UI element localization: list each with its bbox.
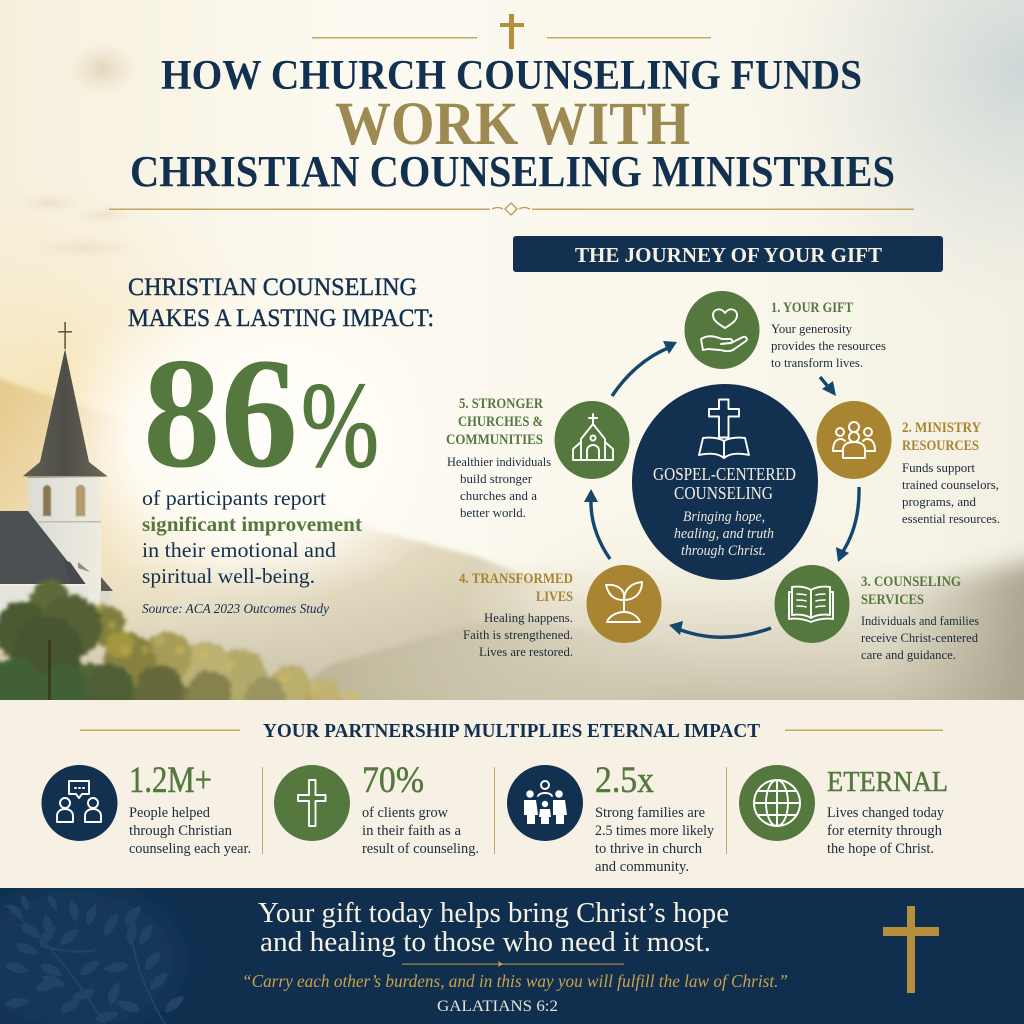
scripture quote: “Carry each other’s burdens, and in this way you will fulfill the law of Christ.” bbox=[242, 971, 788, 991]
stat: 2.5x: 2.5 times more likely bbox=[595, 823, 715, 839]
arrow 3 to 4 bbox=[669, 621, 771, 637]
impact heading bbox=[128, 274, 434, 332]
source note: Source: ACA 2023 Outcomes Study bbox=[142, 602, 330, 617]
step 1: your gift: provides the resources bbox=[771, 338, 886, 353]
step 3: counseling services: Individuals and families bbox=[861, 613, 979, 628]
stat: 1.2M+: 1.2M+ bbox=[129, 760, 212, 801]
center circle: GOSPEL-CENTERED bbox=[653, 464, 796, 484]
step 4: transformed lives bbox=[459, 565, 662, 659]
step 2: ministry resources: Funds support bbox=[902, 460, 975, 475]
step 5: stronger churches and communities: COMMUNITIES bbox=[446, 432, 543, 448]
footer band bbox=[0, 885, 1024, 1024]
step 2: ministry resources bbox=[816, 401, 1000, 526]
title: WORK WITH bbox=[335, 91, 690, 158]
step 2: ministry resources: essential resources. bbox=[902, 511, 1000, 526]
step 2: ministry resources: programs, and bbox=[902, 494, 976, 509]
stat: eternal: ETERNAL bbox=[827, 766, 948, 798]
footer message: and healing to those who need it most. bbox=[260, 926, 711, 958]
hero background scene bbox=[0, 0, 1024, 730]
step 5: stronger churches and communities: CHURCHES & bbox=[458, 414, 543, 430]
icon: cross and bible bbox=[699, 400, 749, 458]
stat: eternal: for eternity through bbox=[827, 823, 943, 839]
step 5 circle with church icon bbox=[554, 401, 630, 479]
step 4 circle with sprout icon bbox=[586, 565, 662, 643]
partnership heading: YOUR PARTNERSHIP MULTIPLIES ETERNAL IMPACT bbox=[263, 720, 760, 742]
step 1: your gift: 1. YOUR GIFT bbox=[771, 300, 853, 316]
step 5: stronger churches and communities bbox=[446, 396, 630, 520]
step 5: stronger churches and communities: better world. bbox=[460, 505, 526, 520]
step 3: counseling services: receive Christ-centered bbox=[861, 630, 978, 645]
footer message: Your gift today helps bring Christ’s hope bbox=[258, 897, 729, 929]
arrow 2 to 3 bbox=[836, 487, 859, 562]
step 3: counseling services: SERVICES bbox=[861, 592, 924, 608]
journey banner: THE JOURNEY OF YOUR GIFT bbox=[575, 243, 882, 267]
step 5: stronger churches and communities: 5. STRONGER bbox=[459, 396, 543, 412]
impact description: significant improvement bbox=[142, 512, 363, 536]
step 3: counseling services: 3. COUNSELING bbox=[861, 574, 961, 590]
impact description: of participants report bbox=[142, 486, 326, 510]
big 86 percent figure bbox=[143, 326, 379, 501]
scripture reference: GALATIANS 6:2 bbox=[437, 998, 558, 1015]
stat: 70% bbox=[274, 760, 479, 857]
church bbox=[0, 322, 113, 642]
icon: gold cross bbox=[883, 906, 939, 993]
stat: 2.5x bbox=[507, 760, 715, 875]
stat: 2.5x: to thrive in church bbox=[595, 841, 703, 857]
stat: eternal bbox=[739, 765, 948, 857]
journey banner bbox=[513, 236, 943, 272]
partnership band bbox=[0, 700, 1024, 888]
stat: 1.2M+: through Christian bbox=[129, 823, 233, 839]
stat: 1.2M+ bbox=[42, 760, 251, 857]
stat: 1.2M+: counseling each year. bbox=[129, 841, 251, 857]
title: CHRISTIAN COUNSELING MINISTRIES bbox=[130, 147, 895, 196]
center circle bbox=[632, 384, 818, 580]
title: HOW CHURCH COUNSELING FUNDS bbox=[161, 52, 862, 99]
title bbox=[130, 52, 895, 196]
center circle: Bringing hope, bbox=[683, 509, 765, 525]
stat: 70%: 70% bbox=[362, 760, 424, 801]
stat: eternal: Lives changed today bbox=[827, 805, 945, 821]
step 3 circle with open book icon bbox=[774, 565, 850, 643]
step 3: counseling services bbox=[774, 565, 979, 662]
step 2: ministry resources: RESOURCES bbox=[902, 438, 979, 454]
icon: cross bbox=[274, 765, 350, 841]
stat: 70%: result of counseling. bbox=[362, 841, 479, 857]
big 86 percent figure: % bbox=[301, 358, 379, 493]
icon: globe bbox=[739, 765, 815, 841]
distant hill left bbox=[0, 372, 760, 720]
icon: family bbox=[507, 765, 583, 841]
step 4: transformed lives: LIVES bbox=[536, 589, 573, 605]
trees bbox=[0, 580, 361, 717]
step 5: stronger churches and communities: churches and a bbox=[460, 488, 537, 503]
step 4: transformed lives: Faith is strengthened. bbox=[463, 627, 573, 642]
center circle: healing, and truth bbox=[674, 526, 774, 542]
step 2: ministry resources: 2. MINISTRY bbox=[902, 420, 981, 436]
center circle: through Christ. bbox=[681, 543, 766, 559]
step 4: transformed lives: Lives are restored. bbox=[479, 644, 573, 659]
step 5: stronger churches and communities: Healthier individuals bbox=[447, 454, 551, 469]
footer leaf pattern bbox=[0, 885, 187, 1024]
arrow 4 to 5 bbox=[584, 489, 610, 559]
stat: eternal: the hope of Christ. bbox=[827, 841, 934, 857]
step 1: your gift: Your generosity bbox=[771, 321, 852, 336]
step 2 circle with people icon bbox=[816, 401, 892, 479]
step 2: ministry resources: trained counselors, bbox=[902, 477, 999, 492]
stat: 70%: in their faith as a bbox=[362, 823, 462, 839]
footer message bbox=[258, 897, 729, 958]
distant hill right bbox=[290, 615, 800, 720]
stat: 2.5x: and community. bbox=[595, 859, 689, 875]
step 5: stronger churches and communities: build stronger bbox=[460, 471, 533, 486]
stat: 2.5x: 2.5x bbox=[595, 760, 654, 801]
icon: counselor and client conversation bbox=[42, 765, 118, 841]
impact heading: MAKES A LASTING IMPACT: bbox=[128, 305, 434, 332]
impact description: spiritual well-being. bbox=[142, 564, 315, 588]
decorative cross top bbox=[500, 14, 524, 49]
impact description bbox=[142, 486, 363, 588]
journey cycle diagram bbox=[446, 291, 1000, 662]
stat: 2.5x: Strong families are bbox=[595, 805, 705, 821]
step 1 circle with heart and hand icon bbox=[684, 291, 760, 369]
step 1: your gift: to transform lives. bbox=[771, 355, 863, 370]
step 4: transformed lives: 4. TRANSFORMED bbox=[459, 571, 573, 587]
arrow 1 to 2 bbox=[820, 377, 836, 396]
step 1: your gift bbox=[684, 291, 886, 370]
stat: 70%: of clients grow bbox=[362, 805, 449, 821]
stat: 1.2M+: People helped bbox=[129, 805, 211, 821]
step 3: counseling services: care and guidance. bbox=[861, 647, 956, 662]
center circle: COUNSELING bbox=[674, 483, 773, 503]
big 86 percent figure: 86 bbox=[143, 326, 298, 501]
impact panel bbox=[128, 274, 434, 617]
impact heading: CHRISTIAN COUNSELING bbox=[128, 274, 417, 301]
step 4: transformed lives: Healing happens. bbox=[484, 610, 573, 625]
arrow 5 to 1 bbox=[612, 341, 677, 396]
impact description: in their emotional and bbox=[142, 538, 336, 562]
